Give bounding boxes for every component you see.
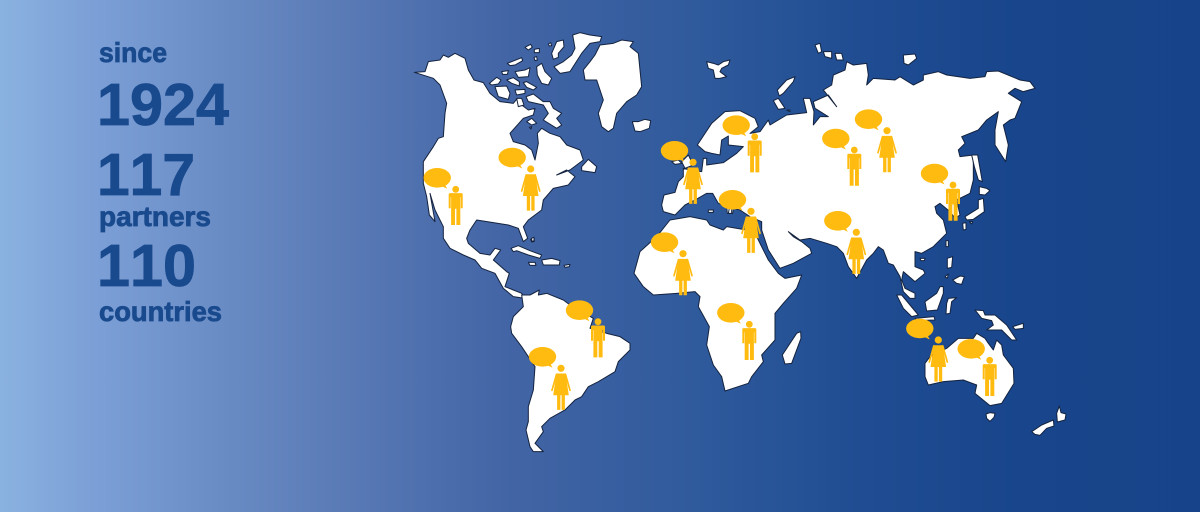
woman: South Asia	[824, 211, 865, 274]
man: Central Asia	[822, 129, 861, 186]
woman: eastern North America	[498, 148, 540, 211]
North America and Arctic islands	[414, 33, 602, 298]
woman: Eastern Mediterranean	[719, 190, 760, 253]
man: northern South America	[566, 300, 605, 357]
label: since: since	[99, 37, 167, 68]
world map	[414, 33, 1066, 452]
label: countries: countries	[99, 296, 222, 327]
woman: southern South America	[529, 347, 570, 410]
Africa and Madagascar	[634, 217, 802, 391]
man: Northern Europe	[722, 115, 762, 172]
Greenland and Iceland	[583, 40, 651, 132]
label: partners: partners	[99, 201, 211, 232]
woman: Western Europe	[661, 141, 702, 204]
Eurasia and nearby islands	[662, 43, 1035, 298]
woman: Siberia	[855, 109, 896, 172]
number: 117: 117	[97, 142, 195, 208]
people with speech bubbles	[424, 109, 997, 410]
man: East Asia	[921, 164, 960, 221]
man: Central Africa	[717, 303, 756, 360]
man: Eastern Australia	[958, 339, 997, 396]
man: western North America	[424, 168, 463, 225]
South America and Caribbean	[511, 237, 630, 452]
Australia and Oceania	[897, 257, 1066, 435]
woman: West Africa	[651, 232, 692, 295]
stats text block	[97, 37, 229, 327]
number: 110: 110	[97, 233, 196, 299]
woman: Western Australia	[906, 319, 947, 382]
number: 1924: 1924	[97, 72, 229, 138]
